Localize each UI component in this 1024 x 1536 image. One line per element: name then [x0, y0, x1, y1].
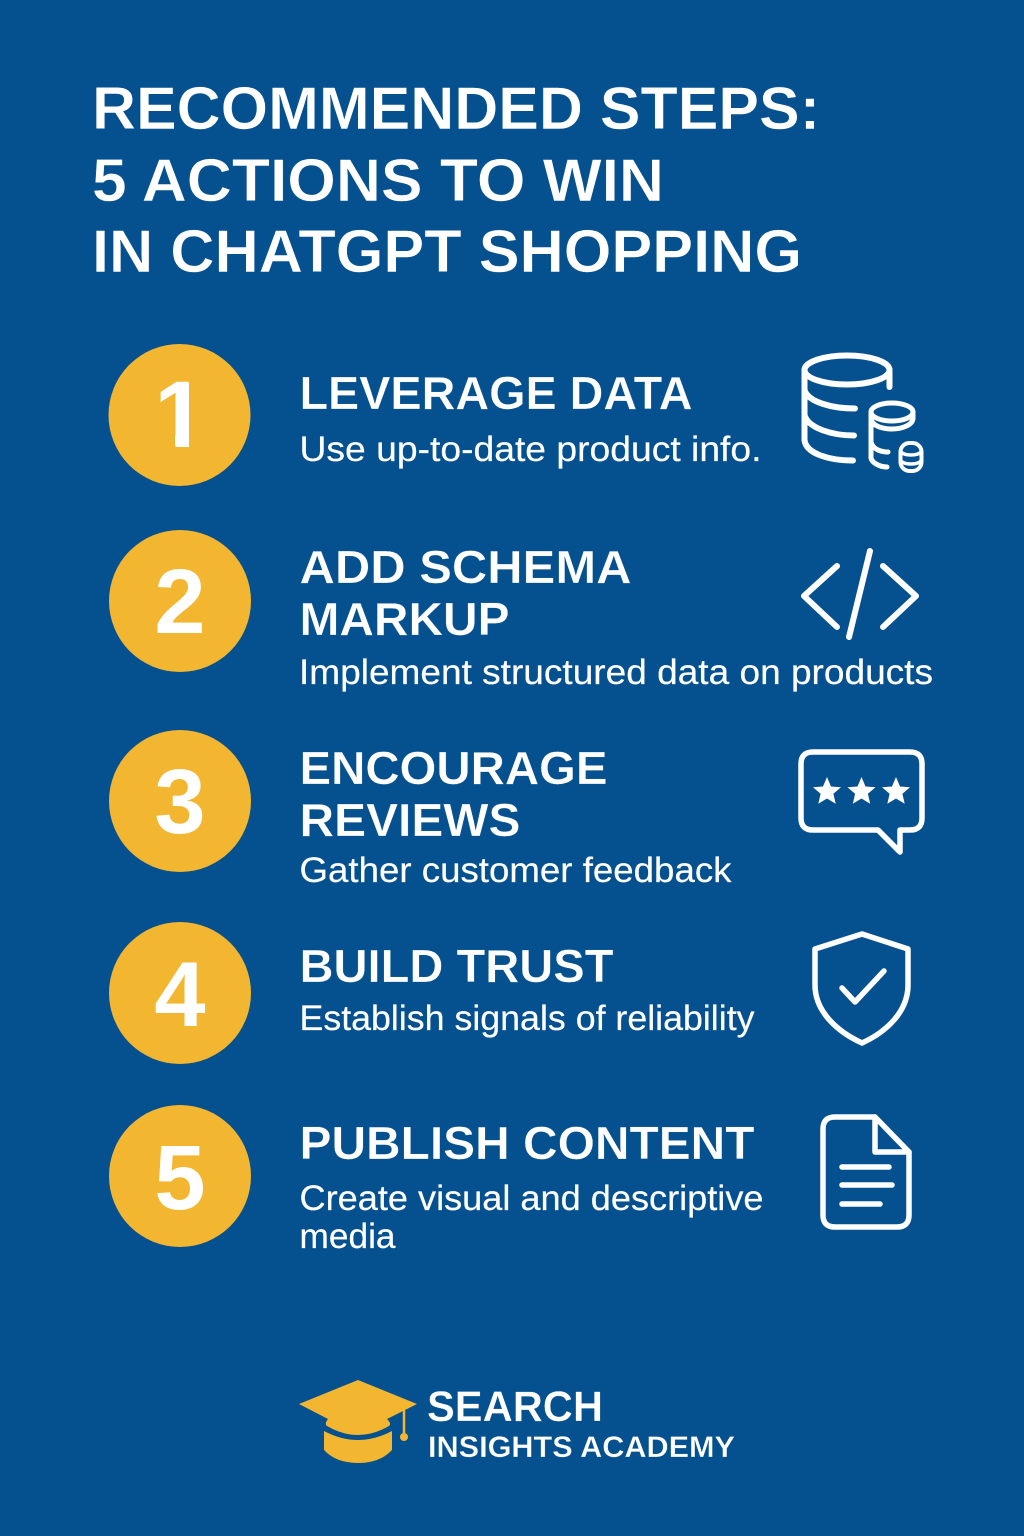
- step 2 heading: ADD SCHEMA: [300, 541, 632, 593]
- step 5 description: Create visual and descriptive: [300, 1179, 764, 1218]
- title: RECOMMENDED STEPS:: [92, 75, 820, 142]
- step 3 heading: REVIEWS: [300, 794, 520, 846]
- step 4 heading: BUILD TRUST: [300, 940, 614, 992]
- title: [92, 75, 820, 285]
- logo wordmark: [427, 1383, 735, 1464]
- step 2 heading: [300, 541, 632, 645]
- logo wordmark: INSIGHTS ACADEMY: [428, 1431, 735, 1464]
- step 2 heading: MARKUP: [300, 593, 510, 645]
- number badge 5: 5: [154, 1127, 206, 1229]
- step 4: build trust: [109, 922, 908, 1064]
- number badge 3: 3: [154, 751, 206, 853]
- number badge 2: [109, 530, 251, 672]
- icon: document: [823, 1117, 909, 1227]
- step 1: leverage data: [108, 344, 922, 486]
- step 5 heading: PUBLISH CONTENT: [300, 1117, 754, 1169]
- step 2: add schema markup: [109, 530, 933, 692]
- number badge 4: [109, 922, 251, 1064]
- step 2 description: Implement structured data on products: [299, 653, 933, 692]
- number badge 3: [109, 730, 251, 872]
- step 4 description: Establish signals of reliability: [300, 999, 755, 1038]
- number badge 2: 2: [154, 551, 206, 653]
- number badge 1: [108, 344, 250, 486]
- step 1 description: Use up-to-date product info.: [300, 430, 762, 469]
- icon: shield with check: [815, 934, 908, 1043]
- title: IN CHATGPT SHOPPING: [92, 218, 802, 285]
- step 3 description: Gather customer feedback: [300, 851, 732, 890]
- step 5: publish content: [109, 1105, 909, 1256]
- step 3 heading: ENCOURAGE: [300, 742, 608, 794]
- icon: code brackets: [804, 551, 916, 637]
- logo wordmark: SEARCH: [427, 1383, 603, 1431]
- step 5 description: media: [300, 1217, 396, 1256]
- icon: review speech bubble with stars: [801, 752, 922, 852]
- icon: graduation cap: [299, 1380, 417, 1463]
- number badge 1: 1: [154, 363, 206, 465]
- step 3 heading: [300, 742, 608, 846]
- infographic canvas: [94, 86, 932, 1463]
- step 5 description: [300, 1179, 764, 1256]
- number badge 4: 4: [154, 944, 206, 1046]
- logo: search insights academy: [299, 1380, 735, 1464]
- title: 5 ACTIONS TO WIN: [92, 147, 664, 214]
- step 3: encourage reviews: [109, 730, 922, 890]
- icon: database: [804, 356, 922, 471]
- step 1 heading: LEVERAGE DATA: [300, 367, 692, 419]
- number badge 5: [109, 1105, 251, 1247]
